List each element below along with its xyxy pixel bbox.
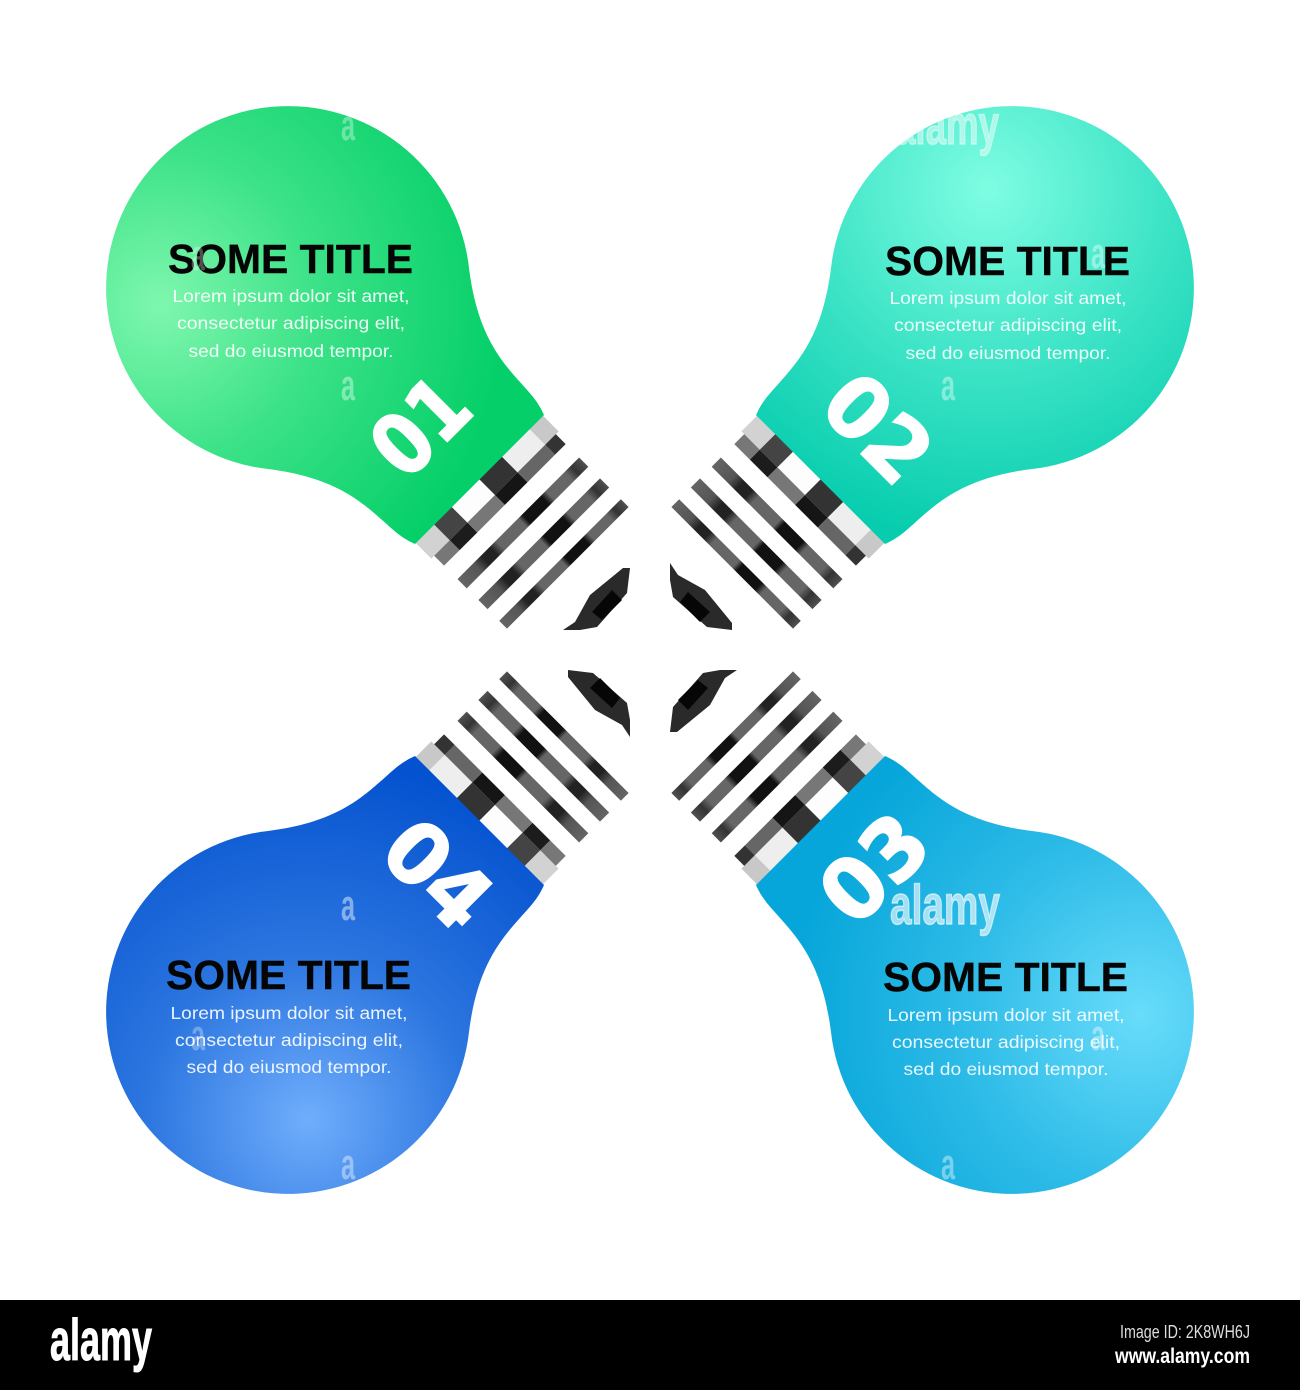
title 03: SOME TITLE [883,954,1128,1000]
bulb glass 01 [106,106,544,544]
website: www.alamy.com [1114,1345,1250,1368]
watermarks: a [341,1140,355,1189]
text block 03: Lorem ipsum dolor sit amet, [888,1005,1124,1025]
watermarks: a [191,231,205,280]
text block 02: Lorem ipsum dolor sit amet, [890,288,1126,308]
number 04: 04 [362,800,512,950]
icon: screw base 01 [412,412,631,631]
text block 04: Lorem ipsum dolor sit amet, [170,1003,408,1023]
watermarks: a [941,1140,955,1189]
title 04: SOME TITLE [166,952,411,998]
image id: Image ID: 2K8WH6J [1120,1322,1250,1342]
bulb glass 04 [106,756,544,1194]
icon: screw base 03 [669,669,888,888]
panel: bulb 03 [669,669,1194,1194]
icon: screw base 02 [669,412,888,631]
watermarks: alamy [895,93,999,156]
text block 04: sed do eiusmod tempor. [186,1057,392,1077]
watermarks [191,93,1105,1189]
watermarks: a [341,881,355,930]
number 02: 02 [802,354,952,504]
bulb glass 02 [756,106,1194,544]
watermarks: a [1091,229,1105,278]
watermarks: a [341,361,355,410]
watermarks: a [341,101,355,150]
watermarks: a [941,361,955,410]
text block 01: Lorem ipsum dolor sit amet, [172,286,410,306]
watermarks: alamy [890,873,1000,936]
text block 01 [172,286,410,361]
number 03: 03 [800,794,950,944]
text block 02: sed do eiusmod tempor. [906,343,1110,363]
text block 03: consectetur adipiscing elit, [892,1032,1120,1052]
text block 03 [888,1005,1124,1079]
panel: bulb 02 [669,106,1194,631]
text block 02 [890,288,1126,363]
watermarks: a [191,1011,205,1060]
text block 03: sed do eiusmod tempor. [904,1059,1108,1079]
text block 02: consectetur adipiscing elit, [894,315,1122,335]
footer bar [0,1300,1300,1390]
title 01: SOME TITLE [168,236,413,282]
panel: bulb 01 [106,106,631,631]
text block 01: sed do eiusmod tempor. [188,341,394,361]
text block 04: consectetur adipiscing elit, [175,1030,403,1050]
text block 01: consectetur adipiscing elit, [177,313,405,333]
footer logo: alamy [50,1308,152,1373]
watermarks: a [1091,1011,1105,1060]
text block 04 [170,1003,408,1077]
panel: bulb 04 [106,669,631,1194]
number 01: 01 [352,358,491,497]
title 02: SOME TITLE [885,238,1130,284]
icon: screw base 04 [412,669,631,888]
bulb glass 03 [756,756,1194,1194]
